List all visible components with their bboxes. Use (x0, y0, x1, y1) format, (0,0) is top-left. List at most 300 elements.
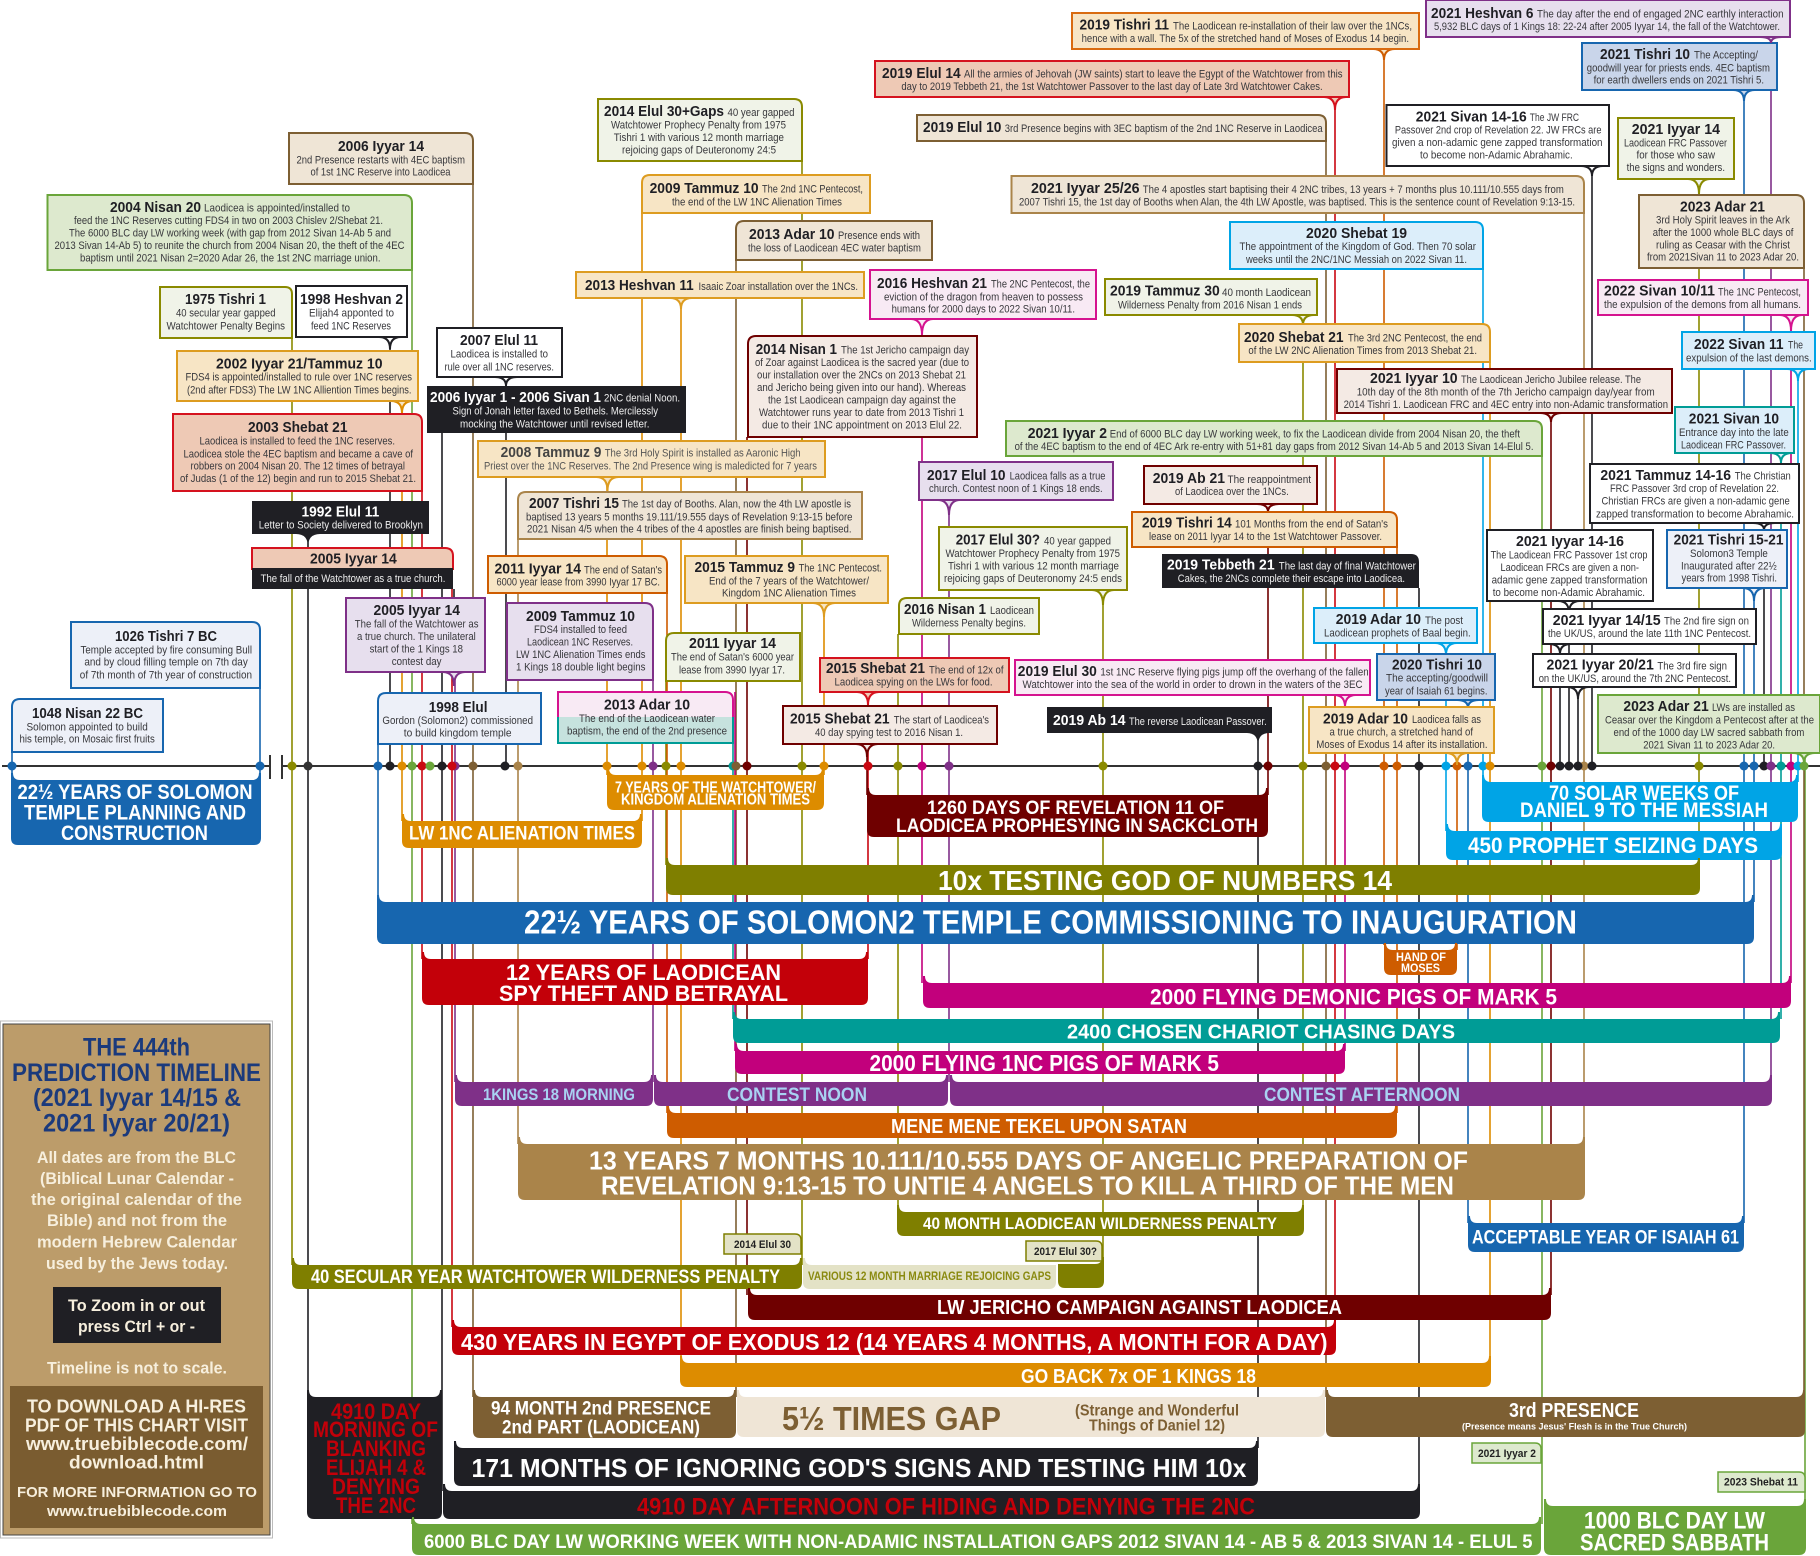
event: 2019 Tishri 14: 2019 Tishri 14 (1142, 516, 1232, 532)
event: 2002 Iyyar 21/Tammuz 10: FDS4 is appointed/installed to rule over 1NC reserves (186, 372, 413, 384)
bar: LW Jericho campaign (748, 1288, 1551, 1320)
event: 2009 Tammuz 10 FDS4: 2009 Tammuz 10 (526, 609, 635, 625)
event: 2021 Tishri 15-21: 2021 Tishri 15-21 (1674, 532, 1784, 548)
event: 2021 Sivan 14-16: to become non-Adamic Abrahamic. (1420, 150, 1573, 162)
bar: 1 Kings 18 contest (455, 1075, 1772, 1106)
event: 2021 Sivan 14-16: Passover 2nd crop of Revelation 22. JW FRCs are (1395, 124, 1602, 136)
download box: FOR MORE INFORMATION GO TO (17, 1484, 257, 1501)
event: 2014 Elul 30+Gaps (598, 99, 802, 161)
event: 2017 Elul 10: Laodicea falls as a true (1010, 470, 1106, 482)
event: 2021 Tishri 10: The Accepting/ (1694, 50, 1758, 62)
event: 2005 Iyyar 14 unilateral start (346, 598, 485, 686)
bar: 40 secular year penalty (292, 1258, 802, 1289)
event: 2019 Adar 10 post Laodicean prophets: 2019 Adar 10 (1336, 612, 1421, 628)
bar: 4910 day morning (307, 1390, 442, 1519)
event: 2009 Tammuz 10 FDS4: 1 Kings 18 double light begins (516, 662, 646, 674)
panel description: modern Hebrew Calendar (37, 1234, 238, 1252)
event: 2015 Shebat 21 end of spying: Laodicea spying on the LWs for food. (834, 676, 992, 688)
event: 2017 Elul 10: 2017 Elul 10 (927, 468, 1006, 484)
bar: 7 years of the Watchtower (607, 768, 824, 810)
bar: 22½ years of Solomon temple: CONSTRUCTION (61, 822, 208, 845)
event: 2014 Nisan 1: of Zoar against Laodicea is the sacred year (due to (755, 357, 969, 369)
panel description: (Biblical Lunar Calendar - (40, 1170, 234, 1188)
event: 2021 Iyyar 20/21 (1533, 654, 1736, 699)
event: 2009 Tammuz 10 FDS4: Laodicean 1NC Reserves. (527, 636, 633, 648)
flag: 2023 Shebat 11: 2023 Shebat 11 (1724, 1476, 1798, 1488)
event: 2021 Tammuz 14-16 (1590, 464, 1799, 530)
bar: 1000 BLC day sacred sabbath: 1000 BLC DAY LW (1584, 1508, 1765, 1534)
bar: various 12 month gaps (803, 1258, 1056, 1289)
event: 2021 Iyyar 10: The Laodicean Jericho Jubilee release. The (1461, 374, 1641, 386)
scale note: Timeline is not to scale. (47, 1360, 227, 1378)
panel description: used by the Jews today. (46, 1255, 228, 1273)
event: 2016 Heshvan 21: eviction of the dragon from heaven to possess (884, 292, 1084, 304)
bar: 5½ times gap: 5½ TIMES GAP (782, 1400, 1001, 1437)
event: 2023 Adar 21 Holy Spirit leaves: ruling as Ceasar with the Christ (1656, 240, 1790, 252)
event: 2021 Iyyar 2: End of 6000 BLC day LW working week, to fix the Laodicean divide from 2004 Nisan 20, the theft (1110, 428, 1520, 440)
event: 2006 Iyyar 14: 2006 Iyyar 14 (338, 139, 424, 155)
event: 1998 Heshvan 2: feed 1NC Reserves (311, 320, 392, 332)
event: 1992 Elul 11 (252, 501, 429, 547)
event: 2016 Nisan 1: Wilderness Penalty begins. (912, 618, 1026, 630)
event: 2020 Tishri 10 (1377, 654, 1495, 708)
bar: 12 years of Laodicean spy theft: 12 YEARS OF LAODICEAN (506, 960, 781, 985)
event: 2007 Elul 11 (437, 328, 562, 386)
bar: 10x testing God (666, 858, 1700, 896)
event: 2021 Tammuz 14-16: zapped transformation to become Abrahamic. (1596, 508, 1794, 520)
bar: 4910 day morning: THE 2NC (336, 1493, 416, 1518)
event: 2017 Elul 30?: Tishri 1 with various 12 month marriage (948, 560, 1119, 572)
event: 2019 Adar 10 stretched hand: Moses of Exodus 14 after its installation. (1316, 739, 1488, 751)
zoom instruction box: To Zoom in or out (68, 1297, 205, 1315)
event: 1048 Nisan 22 BC: Solomon appointed to build (26, 722, 148, 734)
event: 2019 Elul 30 (1015, 660, 1370, 707)
event: 2021 Tishri 10: 2021 Tishri 10 (1600, 47, 1690, 63)
event: 2020 Tishri 10: 2020 Tishri 10 (1392, 658, 1482, 674)
event: 2021 Iyyar 14 Laodicean FRC Passover (1618, 118, 1734, 194)
event: 2019 Elul 10 (917, 115, 1326, 141)
zoom instruction box: press Ctrl + or - (78, 1318, 195, 1336)
event: 2021 Heshvan 6 (1426, 0, 1790, 43)
event: 2021 Iyyar 14/15: the UK/US, around the late 11th 1NC Pentecost. (1548, 628, 1751, 640)
event: 2019 Adar 10 stretched hand (1309, 707, 1494, 765)
event: 1975 Tishri 1: 40 secular year gapped (176, 308, 276, 320)
event: 2006 Iyyar 1 - 2006 Sivan 1: 2006 Iyyar 1 - 2006 Sivan 1 (430, 390, 601, 406)
event: 2021 Iyyar 14/15: 2021 Iyyar 14/15 (1553, 613, 1661, 629)
event: 2011 Iyyar 14 Satan's lease (488, 556, 667, 593)
event: 2002 Iyyar 21/Tammuz 10: (2nd after FDS3) The LW 1NC Alliention Times begins. (187, 384, 412, 396)
event: 2023 Adar 21 Holy Spirit leaves: from 2021Sivan 11 to 2023 Adar 20. (1647, 252, 1799, 264)
bar: 2000 flying 1NC pigs: 2000 FLYING 1NC PIGS OF MARK 5 (870, 1050, 1219, 1076)
event: 2007 Elul 11: Laodicea is installed to (450, 348, 548, 360)
bar: 94 month 2nd presence (473, 1390, 736, 1438)
event: 2009 Tammuz 10 Pentecost (642, 175, 870, 213)
download box: TO DOWNLOAD A HI-RES (27, 1396, 246, 1416)
bar: 450 prophet seizing days (1446, 824, 1782, 860)
event: 2013 Adar 10 end of water baptism (558, 692, 733, 743)
event: 2023 Adar 21 LWs installed (1598, 695, 1820, 763)
event: 1998 Heshvan 2: Elijah4 apponted to (309, 308, 394, 320)
event: 2015 Tammuz 9 (685, 556, 888, 617)
event: 2003 Shebat 21 (173, 414, 422, 491)
event: 1998 Heshvan 2: 1998 Heshvan 2 (300, 292, 403, 308)
event: 2021 Tishri 15-21: Inaugurated after 22½ (1681, 560, 1777, 572)
event: 2015 Tammuz 9: 2015 Tammuz 9 (694, 560, 795, 576)
event: 2023 Adar 21 Holy Spirit leaves: 3rd Holy Spirit leaves in the Ark (1656, 214, 1791, 226)
event: 2021 Iyyar 14 Laodicean FRC Passover: 2021 Iyyar 14 (1632, 122, 1720, 138)
event: 2011 Iyyar 14 end of lease: lease from 3990 Iyyar 17. (679, 664, 785, 676)
event: 1026 Tishri 7 BC: Temple accepted by fire consuming Bull (80, 644, 252, 656)
bar: 70 solar weeks: DANIEL 9 TO THE MESSIAH (1520, 799, 1768, 822)
bar: 2000 flying 1NC pigs (735, 1044, 1345, 1076)
event: 2021 Tishri 15-21 (1667, 530, 1787, 601)
bar: LW 1NC alienation times (402, 814, 642, 848)
event: 2022 Sivan 11: 2022 Sivan 11 (1694, 337, 1784, 353)
event: 2021 Tammuz 14-16: 2021 Tammuz 14-16 (1600, 468, 1731, 484)
event: 1026 Tishri 7 BC: 1026 Tishri 7 BC (115, 629, 217, 645)
event: 2004 Nisan 20: 2004 Nisan 20 (110, 200, 201, 216)
event: 1998 Elul: Gordon (Solomon2) commissioned (382, 715, 533, 727)
event: 2021 Iyyar 2: 2021 Iyyar 2 (1028, 426, 1107, 442)
event: 2013 Adar 10 end of water baptism: 2013 Adar 10 (604, 698, 690, 714)
event: 2014 Nisan 1: and Jericho being given into our hand). Whereas (757, 382, 967, 394)
event: 2011 Iyyar 14 Satan's lease: The end of Satan's (584, 564, 663, 576)
bar: 10x testing God: 10x TESTING GOD OF NUMBERS 14 (938, 865, 1392, 896)
download box: download.html (69, 1452, 204, 1472)
bar: 5½ times gap: Things of Daniel 12) (1089, 1418, 1225, 1434)
bar: 1260 days (867, 788, 1268, 837)
flag: 2021 Iyyar 2 (1472, 1443, 1541, 1463)
event: 1026 Tishri 7 BC: and by cloud filling temple on 7th day (84, 656, 248, 668)
event: 2013 Adar 10 presence ends: Presence ends with (838, 230, 920, 242)
event: 2019 Elul 14: 2019 Elul 14 (882, 66, 961, 82)
event: 1998 Elul: 1998 Elul (429, 700, 488, 716)
bar: 94 month 2nd presence: 94 MONTH 2nd PRESENCE (491, 1398, 711, 1420)
bar: acceptable year of Isaiah 61: ACCEPTABLE YEAR OF ISAIAH 61 (1472, 1228, 1739, 1248)
event: 2019 Tammuz 30 (1105, 279, 1317, 325)
event: 2005 Iyyar 14 fall of the Watchtower (252, 548, 453, 589)
event: 2019 Tebbeth 21: The last day of final Watchtower (1279, 560, 1416, 572)
bar: mene mene tekel (667, 1106, 1397, 1138)
download box: PDF OF THIS CHART VISIT (25, 1414, 249, 1436)
event: 1048 Nisan 22 BC: 1048 Nisan 22 BC (32, 706, 143, 722)
event: 2019 Tammuz 30: 2019 Tammuz 30 (1110, 284, 1220, 300)
event: 2014 Nisan 1: 2014 Nisan 1 (756, 342, 837, 358)
event: 2013 Adar 10 presence ends: 2013 Adar 10 (749, 227, 834, 243)
event: 2013 Heshvan 11 (576, 272, 864, 309)
event: 2019 Tishri 11: hence with a wall. The 5x of the stretched hand of Moses of Exodus 14 begin. (1082, 33, 1409, 45)
event: 2008 Tammuz 9 (478, 441, 825, 491)
bar: 2000 flying demonic pigs (923, 976, 1791, 1010)
bar: olive gap remainder (1058, 1257, 1104, 1288)
bar: 40 month Laodicean wilderness: 40 MONTH LAODICEAN WILDERNESS PENALTY (923, 1214, 1278, 1233)
bar: 22½ years of Solomon2 (377, 895, 1754, 944)
event: 2021 Sivan 14-16: given a non-adamic gene zapped transformation (1392, 137, 1602, 149)
event: 2019 Adar 10 post Laodicean prophets: The post (1425, 615, 1463, 627)
bar: 22½ years of Solomon temple: 22½ YEARS OF SOLOMON (18, 781, 252, 804)
event: 2014 Elul 30+Gaps: Tishri 1 with various 12 month marriage (614, 132, 784, 144)
event: 2006 Iyyar 1 - 2006 Sivan 1 (427, 386, 686, 433)
bar: 6000 BLC day working week: 6000 BLC DAY LW WORKING WEEK WITH NON-ADAMIC INSTALLATION GAPS 2012 SIVAN 14 - AB 5 & 2013 SIVAN 14 - ELUL 5 (424, 1532, 1533, 1553)
event: 2013 Adar 10 presence ends (736, 221, 932, 260)
event: 2013 Adar 10 end of water baptism: The end of the Laodicean water (579, 713, 715, 725)
event: 2019 Elul 14 (875, 61, 1349, 110)
bar: 4910 day afternoon (443, 1484, 1420, 1520)
event: 1975 Tishri 1: Watchtower Penalty Begins (166, 320, 286, 332)
event: 2019 Adar 10 post Laodicean prophets (1314, 608, 1477, 655)
event: 2022 Sivan 11: The (1788, 340, 1803, 352)
event: 2016 Heshvan 21: humans for 2000 days to 2022 Sivan 10/11. (892, 304, 1075, 316)
event: 2020 Shebat 19: weeks until the 2NC/1NC Messiah on 2022 Sivan 11. (1245, 254, 1467, 266)
event: 2017 Elul 30?: 2017 Elul 30? (956, 532, 1040, 548)
event: 2023 Adar 21 Holy Spirit leaves: after the 1000 whole BLC days of (1653, 227, 1794, 239)
event: 2021 Iyyar 10: 2014 Tishri 1. Laodicean FRC and 4EC entry into non-Adamic transformation (1344, 399, 1668, 411)
event: 2014 Elul 30+Gaps: Watchtower Prophecy Penalty from 1975 (611, 120, 786, 132)
panel title: THE 444th (83, 1034, 190, 1062)
event: 2019 Tammuz 30: Wilderness Penalty from 2016 Nisan 1 ends (1118, 300, 1303, 312)
panel title: PREDICTION TIMELINE (12, 1059, 261, 1087)
bar: 171 months: 171 MONTHS OF IGNORING GOD'S SIGNS AND TESTING HIM 10x (472, 1453, 1247, 1483)
bar: 7 years of the Watchtower: 7 YEARS OF THE WATCHTOWER/ (615, 780, 817, 796)
event: 2021 Sivan 10 (1675, 407, 1794, 463)
event: 2021 Iyyar 14/15 (1543, 609, 1756, 654)
event: 2006 Iyyar 1 - 2006 Sivan 1: Sign of Jonah letter faxed to Bethels. Mercilessly (452, 406, 659, 418)
event: 2005 Iyyar 14 unilateral start: The fall of the Watchtower as (355, 618, 479, 630)
flag: 2014 Elul 30: 2014 Elul 30 (734, 1239, 791, 1251)
bar: 4910 day morning: BLANKING (326, 1436, 426, 1461)
event: 2015 Shebat 21 end of spying: The end of 12x of (929, 664, 1004, 676)
event: 2019 Ab 21 (1144, 466, 1317, 512)
bar: 13 years 7 months (518, 1137, 1585, 1200)
bar: go back 7x: GO BACK 7x OF 1 KINGS 18 (1021, 1366, 1256, 1388)
bar: 1000 BLC day sacred sabbath (1544, 1499, 1806, 1556)
event: 2014 Nisan 1: Watchtower runs year to date from 2013 Tishri 1 (759, 407, 964, 419)
event: 2021 Sivan 14-16: 2021 Sivan 14-16 (1416, 110, 1527, 126)
event: 2003 Shebat 21: Laodicea is installed to feed the 1NC reserves. (200, 436, 395, 448)
event: 2017 Elul 30?: Watchtower Prophecy Penalty from 1975 (946, 548, 1120, 560)
event: 2021 Iyyar 25/26: The 4 apostles start baptising their 4 2NC tribes, 13 years + 7 months plus 10.111/10.555 days from (1143, 184, 1564, 196)
event: 2016 Heshvan 21: 2016 Heshvan 21 (877, 276, 987, 292)
event: 2019 Adar 10 stretched hand: 2019 Adar 10 (1323, 712, 1408, 728)
event: 2011 Iyyar 14 end of lease: 2011 Iyyar 14 (689, 636, 776, 652)
event: 2021 Iyyar 2 (1006, 421, 1542, 456)
bar: 5½ times gap: (Strange and Wonderful (1075, 1402, 1239, 1420)
event: 2019 Tebbeth 21: 2019 Tebbeth 21 (1167, 558, 1275, 574)
event: 2004 Nisan 20: Laodicea is appointed/installed to (204, 202, 350, 214)
event: 2021 Iyyar 10: 10th day of the 8th month of the 7th Jericho campaign day/year from (1357, 386, 1655, 398)
event: 2013 Adar 10 end of water baptism: baptism, the end of the 2nd presence (567, 726, 727, 738)
event: 2022 Sivan 10/11: 2022 Sivan 10/11 (1604, 284, 1715, 300)
event: 2023 Adar 21 Holy Spirit leaves: 2023 Adar 21 (1680, 200, 1765, 216)
event: 2007 Tishri 15: 2007 Tishri 15 (529, 496, 619, 512)
event: 2016 Nisan 1: 2016 Nisan 1 (904, 602, 986, 618)
event: 2021 Tammuz 14-16: The Christian (1735, 470, 1791, 482)
event: 2014 Elul 30+Gaps: 2014 Elul 30+Gaps (604, 104, 724, 120)
event: 2023 Adar 21 LWs installed: 2021 Sivan 11 to 2023 Adar 20. (1643, 740, 1775, 752)
bar: 6000 BLC day working week (412, 1517, 1541, 1555)
bar: LW Jericho campaign: LW JERICHO CAMPAIGN AGAINST LAODICEA (937, 1297, 1342, 1319)
bar: 2400 chosen chariot: 2400 CHOSEN CHARIOT CHASING DAYS (1067, 1022, 1455, 1044)
bar: 13 years 7 months: REVELATION 9:13-15 TO UNTIE 4 ANGELS TO KILL A THIRD OF THE MEN (601, 1170, 1454, 1200)
event: 2023 Adar 21 LWs installed: 2023 Adar 21 (1623, 699, 1709, 715)
event: 2003 Shebat 21: of Judas (1 of the 12) begin and run to 2015 Shebat 21. (180, 473, 416, 485)
event: 2019 Elul 10: 2019 Elul 10 (923, 120, 1001, 136)
event: 2008 Tammuz 9: 2008 Tammuz 9 (501, 445, 601, 461)
event: 2015 Shebat 21 end of spying: 2015 Shebat 21 (826, 661, 925, 677)
download box: www.truebiblecode.com (46, 1503, 227, 1520)
event: 2019 Tebbeth 21 (1162, 554, 1419, 588)
event: 2021 Iyyar 14-16: The Laodicean FRC Passover 1st crop (1491, 550, 1648, 562)
event: 2004 Nisan 20: 2013 Sivan 14-Ab 5) to reunite the church from 2004 Nisan 20, the theft of the 4EC (54, 240, 405, 252)
event: 2019 Ab 21: of Laodicea over the 1NCs. (1175, 486, 1289, 498)
event: 2020 Tishri 10: year of Isaiah 61 begins. (1385, 686, 1488, 698)
panel description: Bible) and not from the (47, 1212, 227, 1230)
event: 2005 Iyyar 14 unilateral start: 2005 Iyyar 14 (374, 603, 460, 619)
event: 2021 Iyyar 14 Laodicean FRC Passover: Laodicean FRC Passover (1624, 138, 1727, 150)
event: 2020 Shebat 19 (1230, 222, 1483, 269)
event: 2019 Ab 14: The reverse Laodicean Passover. (1129, 716, 1267, 728)
bar: 450 prophet seizing days: 450 PROPHET SEIZING DAYS (1468, 833, 1758, 858)
bar: various 12 month gaps: VARIOUS 12 MONTH MARRIAGE REJOICING GAPS (808, 1269, 1051, 1283)
event: 2021 Iyyar 10 (1337, 369, 1672, 422)
bar: 5½ times gap (737, 1390, 1325, 1437)
bar: 171 months (454, 1441, 1258, 1486)
event: 2017 Elul 30?: rejoicing gaps of Deuteronomy 24:5 ends (944, 573, 1123, 585)
download box (10, 1386, 263, 1528)
bar: 22½ years of Solomon2: 22½ YEARS OF SOLOMON2 TEMPLE COMMISSIONING TO INAUGURATION (524, 904, 1577, 940)
bar: mene mene tekel: MENE MENE TEKEL UPON SATAN (891, 1116, 1187, 1138)
event: 2006 Iyyar 14: 2nd Presence restarts with 4EC baptism (296, 154, 465, 166)
event: 1026 Tishri 7 BC (71, 622, 260, 688)
bar: 3rd presence: 3rd PRESENCE (1509, 1400, 1639, 1422)
event: 2021 Iyyar 14-16: to become non-Adamic Abrahamic. (1493, 587, 1645, 599)
event: 2014 Elul 30+Gaps: 40 year gapped (728, 107, 794, 119)
bar: 1000 BLC day sacred sabbath: SACRED SABBATH (1580, 1530, 1769, 1556)
event: 2022 Sivan 10/11 (1598, 280, 1808, 331)
event: 2017 Elul 10: church. Contest noon of 1 Kings 18 ends. (929, 483, 1103, 495)
panel title (12, 1034, 261, 1138)
download box: www.truebiblecode.com/ (25, 1433, 248, 1454)
event: 2023 Adar 21 LWs installed: LWs are installed as (1712, 702, 1796, 714)
event: 2009 Tammuz 10 Pentecost: 2009 Tammuz 10 (650, 181, 759, 197)
event: 2019 Tishri 14 (1132, 512, 1397, 547)
event: 1992 Elul 11: 1992 Elul 11 (302, 504, 379, 520)
event: 1048 Nisan 22 BC (12, 699, 163, 752)
event: 2005 Iyyar 14 unilateral start: a true church. The unilateral (357, 631, 476, 643)
event: 2009 Tammuz 10 Pentecost: The 2nd 1NC Pentecost, (762, 184, 863, 196)
event: 2004 Nisan 20: The 6000 BLC day LW working week (with gap from 2012 Sivan 14-Ab 5 and (69, 228, 391, 240)
bar: 70 solar weeks (1482, 775, 1798, 822)
flag: 2021 Iyyar 2: 2021 Iyyar 2 (1478, 1448, 1536, 1460)
event: 2020 Shebat 21: 2020 Shebat 21 (1244, 330, 1344, 346)
bar: LW 1NC alienation times: LW 1NC ALIENATION TIMES (409, 824, 635, 844)
bar: 2000 flying demonic pigs: 2000 FLYING DEMONIC PIGS OF MARK 5 (1150, 984, 1557, 1010)
event: 2011 Iyyar 14 Satan's lease: 6000 year lease from 3990 Iyyar 17 BC. (496, 576, 660, 588)
bar: 4910 day afternoon: 4910 DAY AFTERNOON OF HIDING AND DENYING THE 2NC (637, 1494, 1255, 1520)
event: 2021 Sivan 14-16: The JW FRC (1530, 112, 1579, 124)
event: 2014 Nisan 1: due to their 1NC appointment on 2013 Elul 22. (762, 420, 962, 432)
bar: 40 secular year penalty: 40 SECULAR YEAR WATCHTOWER WILDERNESS PENALTY (311, 1267, 780, 1288)
event: 2019 Elul 30: 2019 Elul 30 (1018, 664, 1097, 680)
event: 2021 Tammuz 14-16: FRC Passover 3rd crop of Revelation 22. (1610, 483, 1779, 495)
event: 2014 Nisan 1: our installation over the 2NCs on 2013 Shebat 21 (757, 370, 966, 382)
event: 2009 Tammuz 10 FDS4: FDS4 installed to feed (534, 624, 627, 636)
bar: hand of Moses (1384, 943, 1457, 975)
event: 2007 Tishri 15: 2021 Nisan 4/5 when the 4 tribes of the 4 apostles are finish being baptised. (527, 524, 852, 536)
event: 2004 Nisan 20: feed the 1NC Reserves cutting FDS4 in two on 2003 Chislev 2/Shebat 21. (74, 215, 383, 227)
event: 2015 Shebat 21 start of test: 40 day spying test to 2016 Nisan 1. (815, 727, 963, 739)
panel description: All dates are from the BLC (37, 1149, 236, 1167)
event: 2020 Shebat 19: 2020 Shebat 19 (1306, 226, 1407, 242)
bar: 3rd presence: (Presence means Jesus' Flesh is in the True Church) (1462, 1422, 1687, 1432)
event: 2005 Iyyar 14 fall of the Watchtower: 2005 Iyyar 14 (310, 552, 397, 568)
event: 2007 Elul 11: 2007 Elul 11 (460, 333, 538, 349)
event: 2019 Elul 14: All the armies of Jehovah (JW saints) start to leave the Egypt of the Watchtower from this (964, 68, 1343, 80)
bar: 12 years of Laodicean spy theft (422, 952, 868, 1006)
bar: 22½ years of Solomon temple (11, 773, 261, 845)
event: 2015 Tammuz 9: The 1NC Pentecost. (799, 562, 882, 574)
event: 2007 Tishri 15: baptised 13 years 5 months 19.111/19.555 days of Revelation 9:13-15 before (526, 512, 852, 524)
event: 2021 Iyyar 14-16: 2021 Iyyar 14-16 (1516, 534, 1624, 550)
event: 2019 Elul 30: 1st 1NC Reserve flying pigs jump off the overhang of the fallen (1100, 666, 1369, 678)
event: 2011 Iyyar 14 Satan's lease: 2011 Iyyar 14 (494, 562, 581, 578)
event: 2015 Tammuz 9: Kingdom 1NC Alienation Times (722, 588, 857, 600)
event: 2013 Heshvan 11: Isaaic Zoar installation over the 1NCs. (698, 281, 858, 293)
flag: 2014 Elul 30 (724, 1234, 801, 1254)
bar: go back 7x (680, 1356, 1491, 1388)
event: 2019 Tishri 11: The Laodicean re-installation of their law over the 1NCs, (1173, 20, 1412, 32)
event: 2021 Iyyar 14-16: adamic gene zapped transformation (1492, 574, 1648, 586)
panel description: the original calendar of the (31, 1191, 242, 1209)
event: 2021 Sivan 10: Entrance day into the late (1679, 427, 1789, 439)
event: 2019 Adar 10 stretched hand: Laodicea falls as (1412, 714, 1482, 726)
event: 2019 Ab 21: 2019 Ab 21 (1153, 471, 1225, 487)
event: 2019 Elul 14: day to 2019 Tebbeth 21, the 1st Watchtower Passover to the last day of Late 3rd Watchtower Cakes. (901, 81, 1323, 93)
event: 2003 Shebat 21: robbers on 2004 Nisan 20. The 12 times of betrayal (190, 460, 405, 472)
flag: 2017 Elul 30?: 2017 Elul 30? (1034, 1246, 1097, 1258)
event: 2004 Nisan 20: baptism until 2021 Nisan 2=2020 Adar 26, the 1st 2NC marriage union. (80, 252, 380, 264)
event: 2002 Iyyar 21/Tammuz 10: 2002 Iyyar 21/Tammuz 10 (216, 356, 382, 372)
event: 2019 Ab 14 (1047, 707, 1272, 746)
event: 2019 Ab 14: 2019 Ab 14 (1053, 713, 1126, 729)
event: 2021 Tishri 10 (1582, 43, 1777, 101)
event: 2008 Tammuz 9: Priest over the 1NC Reserves. The 2nd Presence wing is maledicted for 7 years (484, 460, 818, 472)
event: 2021 Iyyar 14 Laodicean FRC Passover: the signs and wonders. (1627, 162, 1725, 174)
bar: hand of Moses: HAND OF (1396, 952, 1446, 964)
event: 2015 Shebat 21 start of test: The start of Laodicea's (894, 714, 990, 726)
event: 2020 Shebat 19: The appointment of the Kingdom of God. Then 70 solar (1240, 241, 1476, 253)
event: 2005 Iyyar 14 unilateral start: start of the 1 Kings 18 (370, 644, 463, 656)
event: 2021 Tishri 10: goodwill year for priests ends. 4EC baptism (1587, 62, 1770, 74)
bar: 4910 day morning: DENYING (332, 1474, 420, 1499)
event: 2011 Iyyar 14 end of lease (666, 633, 800, 681)
event: 2021 Tammuz 14-16: Christian FRCs are given a non-adamic gene (1602, 496, 1790, 508)
event: 2016 Heshvan 21: The 2NC Pentecost, the (991, 278, 1090, 290)
event: 2015 Shebat 21 end of spying (820, 658, 1009, 705)
event: 2021 Iyyar 20/21: 2021 Iyyar 20/21 (1546, 658, 1654, 674)
event: 2021 Heshvan 6: The day after the end of engaged 2NC earthly interaction (1537, 8, 1784, 20)
bar: 1 Kings 18 contest: CONTEST NOON (727, 1085, 867, 1106)
event: 2013 Heshvan 11: 2013 Heshvan 11 (585, 278, 694, 294)
event: 2021 Iyyar 10: 2021 Iyyar 10 (1370, 371, 1458, 387)
event: 2004 Nisan 20 (48, 195, 412, 270)
event: 1992 Elul 11: Letter to Society delivered to Brooklyn (259, 520, 423, 532)
event: 2014 Nisan 1: The 1st Jericho campaign day (841, 344, 970, 356)
bar: 4910 day morning: MORNING OF (313, 1417, 438, 1442)
bar: 94 month 2nd presence: 2nd PART (LAODICEAN) (502, 1418, 700, 1438)
timeline axis (2, 755, 1820, 779)
bar: 1 Kings 18 contest: 1KINGS 18 MORNING (483, 1085, 635, 1104)
